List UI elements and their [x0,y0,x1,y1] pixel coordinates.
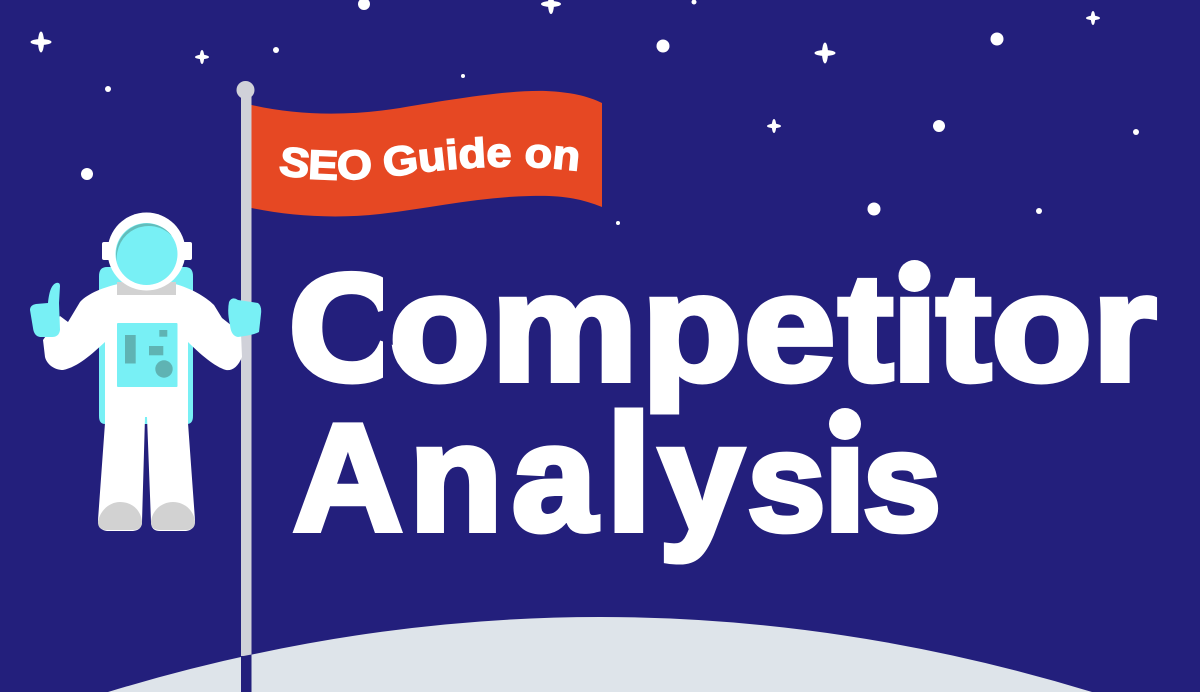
title: Analysis: i [824,393,866,563]
moon surface [108,617,1092,692]
title: Competitor: p [642,243,742,413]
title: Analysis: A [293,393,403,563]
title: Competitor: o [992,243,1092,413]
title: Analysis: n [410,393,502,563]
title: Competitor: t [936,243,991,413]
star field [30,0,1139,225]
title: Analysis: l [606,381,652,565]
flag text: SEO Guide on [279,136,578,180]
suit [43,284,242,531]
astronaut [30,212,261,531]
title: Competitor: o [389,243,490,413]
title: Competitor: t [839,243,893,413]
title: Competitor: r [1092,243,1156,413]
title: Analysis [293,381,941,565]
flag pole [236,81,254,692]
title: Competitor: i [892,243,938,413]
left hand thumbs up [30,283,60,337]
flag [252,90,602,216]
collar [117,282,176,295]
title: Competitor: C [289,243,407,413]
backpack [99,267,193,424]
title: Analysis: s [863,403,941,560]
chest panel [117,323,178,387]
title: Competitor: e [744,243,835,413]
title: Analysis: y [659,393,744,563]
right hand gripping pole [228,298,261,337]
title: Competitor: m [492,243,637,413]
boots [98,502,142,530]
title: Competitor [289,243,1156,413]
title: Analysis: a [512,393,598,563]
helmet [102,242,192,260]
title: Analysis: s [748,403,825,560]
